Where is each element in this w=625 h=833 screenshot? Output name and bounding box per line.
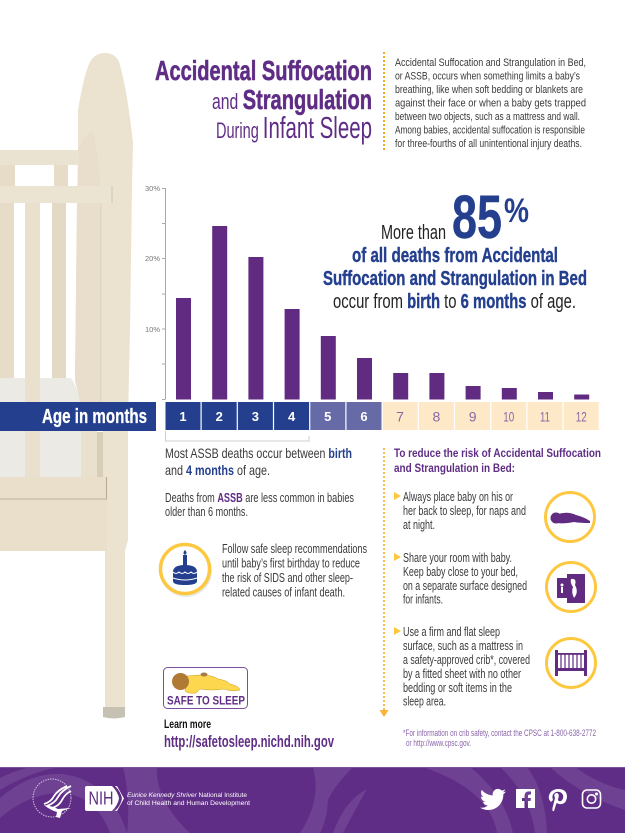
link: safe to sleep website: http://safetosleep.nichd.nih.gov (164, 732, 334, 751)
title: and Strangulation (212, 84, 372, 115)
illustration: crib (0, 53, 133, 718)
logo: safe to sleep (164, 668, 248, 708)
footnote (403, 728, 596, 748)
text: institute name: of Child Health and Human Development (127, 800, 250, 807)
text: most deaths (165, 445, 352, 478)
bullet: firm flat surface: by a fitted sheet with no other (403, 667, 521, 681)
bullet: share your room: Share your room with baby. (403, 551, 512, 565)
icon: instagram (582, 790, 600, 808)
axis band: age in months: 5 (324, 409, 331, 424)
callout: 85 percent: of all deaths from Accidental (352, 245, 558, 267)
axis band: age in months: 4 (288, 409, 296, 424)
intro text: or ASSB, occurs when something limits a baby’s (395, 70, 580, 82)
axis band: age in months: 12 (576, 408, 587, 424)
callout: 85 percent: % (504, 192, 529, 230)
text: safe sleep recommendations (222, 542, 367, 600)
axis band: age in months (0, 402, 599, 431)
text: less common: Deaths from ASSB are less common in babies (165, 491, 354, 505)
logo: NIH: NIH (88, 788, 114, 808)
text: institute name: Eunice Kennedy Shriver National Institute (127, 792, 247, 799)
axis band: age in months: 6 (360, 409, 368, 424)
intro text: for three-fourths of all unintentional injury deaths. (395, 138, 582, 150)
bullet: share your room (394, 551, 527, 606)
text: safe sleep recommendations: related causes of infant death. (222, 586, 345, 600)
callout: 85 percent: 85 (452, 183, 502, 251)
logo: HHS seal (33, 779, 71, 818)
footnote: or http://www.cpsc.gov. (406, 738, 471, 748)
intro text: Accidental Suffocation and Strangulation in Bed, (395, 57, 586, 69)
bar chart: deaths by age in months: 30% (145, 184, 160, 193)
text: safe sleep recommendations: the risk of SIDS and other sleep- (222, 571, 353, 585)
text: less common: older than 6 months. (165, 505, 248, 519)
bar chart: deaths by age in months: 20% (145, 254, 160, 263)
text: learn more: Learn more (164, 717, 211, 731)
bar chart: deaths by age in months: 10% (145, 325, 160, 334)
callout: 85 percent: More than (381, 222, 446, 244)
axis band: age in months: 11 (540, 408, 550, 424)
text: safe sleep recommendations: until baby’s first birthday to reduce (222, 556, 360, 570)
bullet: share your room: on a separate surface designed (403, 579, 527, 593)
bullet: firm flat surface: bedding or soft items in the (403, 681, 512, 695)
bullet: firm flat surface: Use a firm and flat sleep (403, 625, 500, 639)
bullet: firm flat surface: a safety-approved crib*, covered (403, 653, 530, 667)
bracket: months 1 to 4 (166, 431, 309, 441)
icon: twitter (480, 789, 506, 810)
text: less common (165, 491, 354, 519)
footer band (0, 767, 625, 833)
icon: baby on back (546, 492, 594, 542)
arrow: dotted orange arrow (380, 448, 388, 717)
axis band: age in months: 8 (433, 408, 441, 424)
bullet: back to sleep (394, 490, 526, 532)
title: During Infant Sleep (216, 110, 372, 145)
text: most deaths: and 4 months of age. (165, 462, 270, 478)
text: safe sleep recommendations: Follow safe sleep recommendations (222, 542, 367, 556)
icon: room sharing (546, 562, 596, 612)
heading: reduce the risk: and Strangulation in Bed: (394, 461, 515, 475)
axis band: age in months: 7 (396, 408, 404, 424)
dotted divider (383, 52, 385, 150)
axis band: age in months: 2 (216, 409, 223, 424)
icon: pinterest (549, 789, 567, 811)
text: institute name (127, 792, 250, 807)
heading: reduce the risk (394, 446, 601, 475)
bullet: share your room: for infants. (403, 592, 443, 606)
bullet: firm flat surface: sleep area. (403, 694, 446, 708)
icon: birthday cake (160, 544, 212, 597)
axis band: age in months: 10 (503, 408, 514, 424)
bullet: back to sleep: her back to sleep, for naps and (403, 504, 526, 518)
text: most deaths: Most ASSB deaths occur between birth (165, 445, 352, 461)
title: Accidental Suffocation (155, 55, 372, 86)
logo: safe to sleep: SAFE TO SLEEP (167, 696, 245, 708)
bullet: firm flat surface (394, 625, 530, 708)
intro text (395, 57, 586, 150)
intro text: breathing, like when soft bedding or blankets are (395, 84, 583, 96)
bullet: back to sleep: Always place baby on his or (403, 490, 513, 504)
axis band: age in months: 3 (252, 409, 259, 424)
bullet: share your room: Keep baby close to your bed, (403, 565, 518, 579)
icon: facebook (516, 789, 535, 808)
axis band: age in months: 1 (179, 409, 187, 424)
logo: NIH (85, 786, 124, 811)
intro text: against their face or when a baby gets trapped (395, 98, 586, 110)
axis band: age in months: Age in months (42, 406, 147, 428)
axis band: age in months: 9 (469, 408, 477, 424)
title (155, 55, 372, 145)
icon: crib (546, 638, 596, 688)
bullet: back to sleep: at night. (403, 518, 435, 532)
bullet: firm flat surface: surface, such as a mattress in (403, 639, 523, 653)
callout: 85 percent (323, 183, 587, 313)
callout: 85 percent: occur from birth to 6 months of age. (333, 291, 576, 313)
bar chart: deaths by age in months (145, 184, 589, 400)
